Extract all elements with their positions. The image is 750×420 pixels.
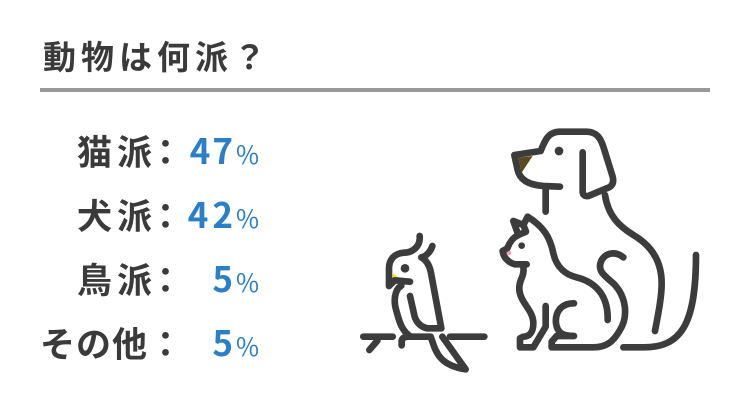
- colon: dog: ：: [148, 189, 183, 240]
- value: other: 5: [212, 316, 236, 367]
- label: bird: 鳥派: [77, 253, 157, 304]
- colon: cat: ：: [148, 125, 183, 176]
- value: dog: 42: [188, 188, 237, 239]
- label: other: その他: [40, 317, 148, 368]
- colon: bird: ：: [148, 253, 183, 304]
- colon: other: ：: [148, 317, 183, 368]
- percent sign: cat: %: [236, 136, 259, 172]
- row: cat: [77, 124, 259, 176]
- title: 動物は何派？: [43, 31, 271, 79]
- icon: dog: [514, 132, 696, 347]
- label: dog: 犬派: [77, 189, 157, 240]
- value: cat: 47: [190, 124, 235, 175]
- percent sign: bird: %: [236, 264, 259, 300]
- percent sign: dog: %: [236, 200, 259, 236]
- row: dog: [77, 188, 259, 240]
- percent sign: other: %: [236, 328, 259, 364]
- value: bird: 5: [212, 252, 236, 303]
- icon: cockatiel on perch: [363, 236, 484, 369]
- label: cat: 猫派: [77, 125, 157, 176]
- row: other: [40, 316, 259, 368]
- row: bird: [77, 252, 259, 304]
- title rule: [40, 88, 710, 92]
- icon: cat: [503, 217, 625, 347]
